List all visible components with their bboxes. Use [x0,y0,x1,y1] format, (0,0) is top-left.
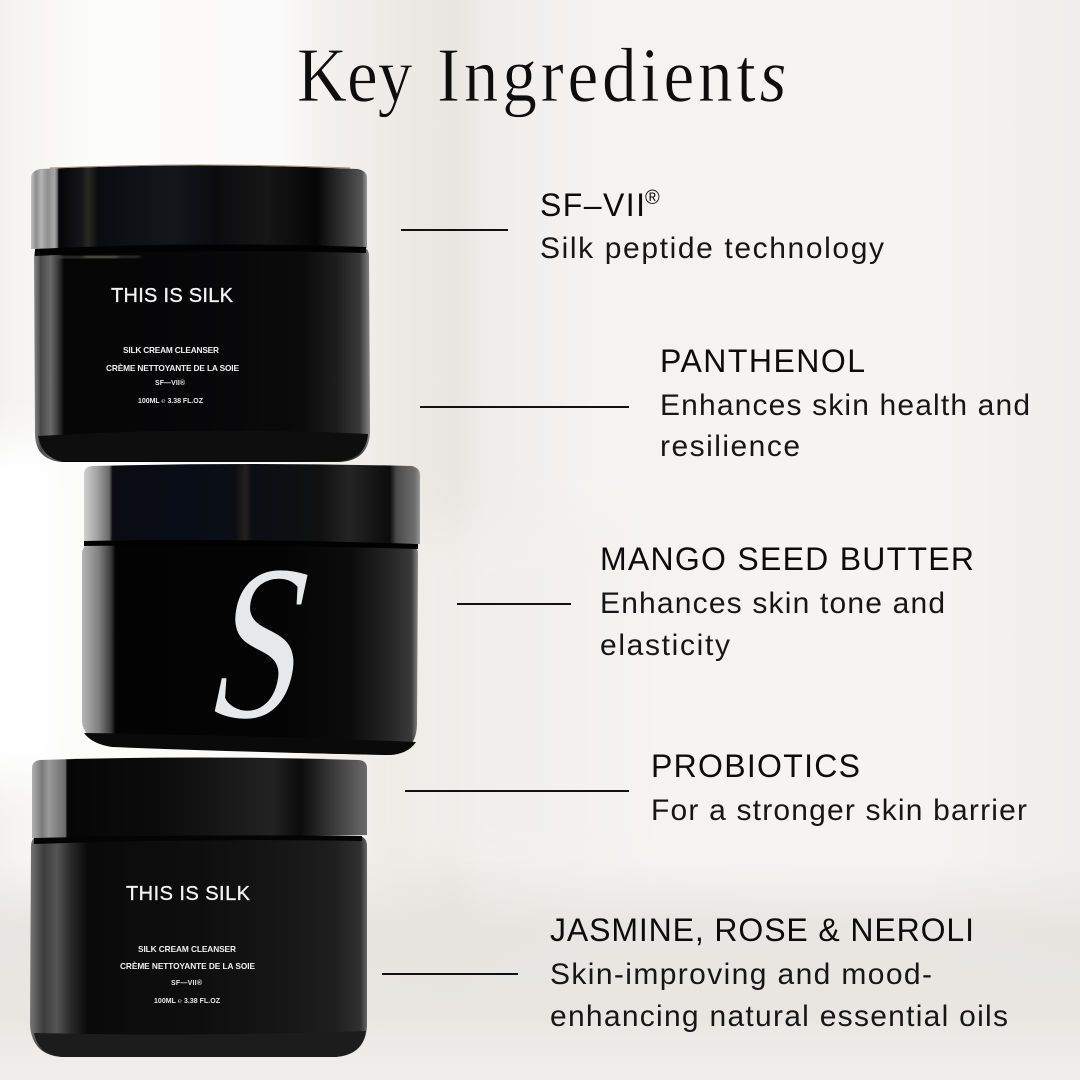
jar 1 product name: SILK CREAM CLEANSER [123,345,219,355]
jar 1 french name: CRÈME NETTOYANTE DE LA SOIE [106,363,239,373]
title: Ingredient [437,33,760,118]
jar 3 volume: 100ML ℮ 3.38 FL.OZ [154,998,221,1005]
jar 1 brand: THIS IS SILK [111,285,234,307]
jar 3 [30,758,367,1057]
jar 1 volume: 100ML ℮ 3.38 FL.OZ [138,398,204,405]
SF-VII description: Silk peptide technology [540,232,884,265]
Jasmine description: Skin-improving and mood- [550,958,932,991]
Probiotics description: For a stronger skin barrier [651,794,1027,827]
ingredient: Panthenol [420,343,1030,463]
Mango description line 2: elasticity [600,629,730,662]
jar 1 base [38,430,368,461]
jar 3 glint [88,848,156,850]
jar 3 french name: CRÈME NETTOYANTE DE LA SOIE [120,961,255,971]
jar 2 [82,464,420,765]
ingredient: SF-VII [401,187,884,265]
jar 2 neck [84,540,418,549]
jar 2 body [82,543,418,755]
Panthenol name: PANTHENOL [660,343,865,379]
jar 1 neck [35,244,366,256]
jar 2 base [84,733,416,755]
jar 1 lid top highlight [50,165,350,168]
Mango name: MANGO SEED BUTTER [600,541,974,577]
jar 1 label [106,285,239,405]
jar 3 SF-VII: SF—VII® [171,979,203,987]
jar 3 body [30,836,367,1057]
SF-VII name: SF–VII [540,187,645,223]
jar 3 neck [34,835,362,844]
jar 1 SF-VII: SF—VII® [155,379,186,387]
Mango description: Enhances skin tone and [600,587,945,620]
registered mark: ® [645,187,660,209]
ingredient: Mango seed butter [457,541,974,662]
jar 3 brand: THIS IS SILK [126,883,251,905]
ingredient: Probiotics [405,748,1027,827]
jar 2 S monogram: S [192,519,336,765]
title: Key [297,33,413,118]
Panthenol description: Enhances skin health and [660,389,1030,422]
jar 1 glints [58,256,140,258]
Jasmine name: JASMINE, ROSE & NEROLI [550,912,974,948]
jar 3 label [120,883,255,1005]
jar 1 body [34,246,370,462]
jar 1 lid [31,166,367,249]
Panthenol description line 2: resilience [660,430,800,463]
jar stack [30,165,420,1057]
jar 3 product name: SILK CREAM CLEANSER [138,944,236,954]
Jasmine description line 2: enhancing natural essential oils [550,1000,1008,1033]
ingredient: Jasmine, rose and neroli [382,912,1008,1033]
Probiotics name: PROBIOTICS [651,748,860,784]
title: s [760,33,787,118]
jar 2 lid [84,464,420,544]
jar 3 base [34,1031,366,1057]
jar 1 [31,165,370,462]
jar 3 lid [32,758,367,838]
